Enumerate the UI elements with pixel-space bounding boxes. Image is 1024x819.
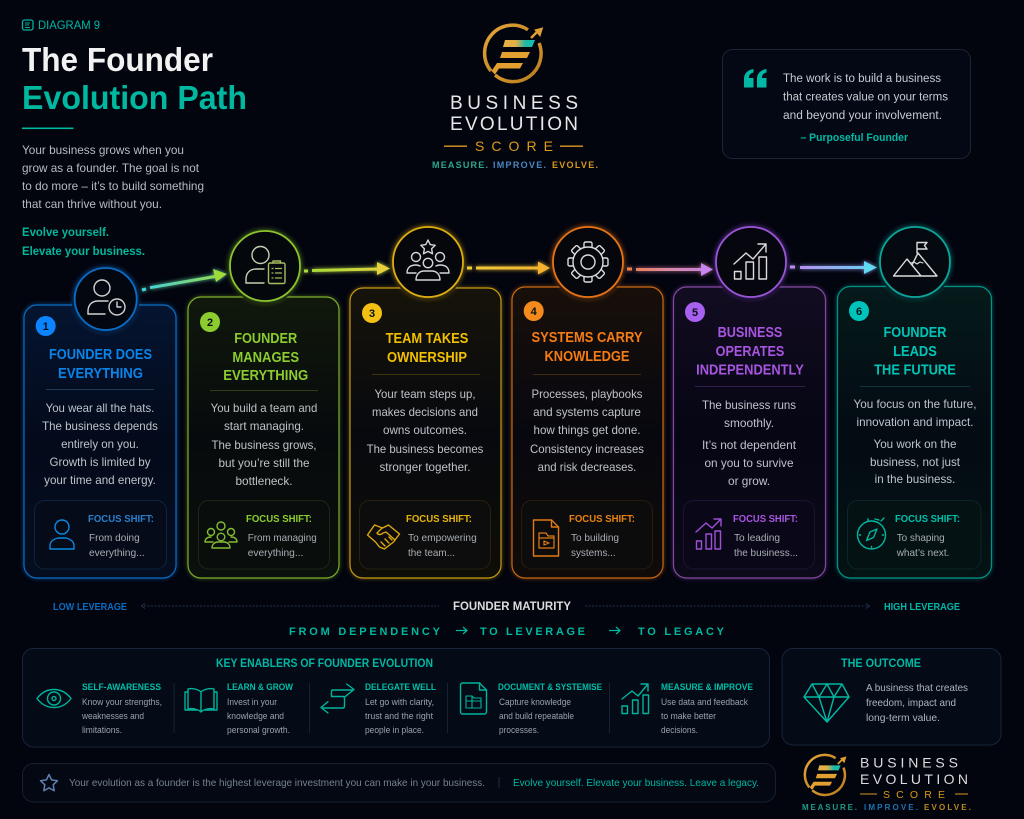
heading: FOUNDER bbox=[234, 331, 298, 347]
item: delegate well: Let go with clarity, bbox=[365, 697, 434, 708]
panel: bottom message: Your evolution as a founder is the highest leverage investment you can make in your business. bbox=[69, 777, 485, 789]
panel: stage 4 bbox=[512, 224, 663, 578]
panel: stage 5 bbox=[674, 224, 826, 578]
heading: THE OUTCOME bbox=[841, 658, 921, 670]
icon: team bbox=[205, 522, 237, 548]
arrow: stage 1 to 2 bbox=[142, 269, 227, 290]
description: Growth is limited by bbox=[50, 455, 150, 469]
icon: eye bbox=[37, 690, 71, 708]
icon: growth chart bbox=[696, 519, 721, 549]
panel: stage 3 bbox=[350, 224, 501, 578]
intro text: Your business grows when you bbox=[22, 143, 184, 157]
logo: Business Evolution Score: MEASURE. bbox=[432, 160, 488, 170]
item: learn and grow: Invest in your bbox=[227, 697, 277, 708]
badge: 6: 6 bbox=[856, 306, 862, 318]
icon: quote mark bbox=[744, 69, 766, 88]
description bbox=[854, 397, 976, 486]
label: low leverage: LOW LEVERAGE bbox=[53, 601, 127, 613]
description: Consistency increases bbox=[530, 442, 644, 456]
panel: bottom message bbox=[22, 764, 776, 802]
title: Evolution Path bbox=[22, 79, 247, 116]
logo: footer: EVOLVE. bbox=[924, 803, 971, 812]
logo: footer: EVOLUTION bbox=[860, 771, 968, 787]
arrow: stage 2 to 3 bbox=[304, 262, 390, 275]
heading: EVERYTHING bbox=[58, 366, 143, 382]
description: freedom, impact and bbox=[866, 697, 956, 709]
description: and risk decreases. bbox=[538, 460, 636, 474]
focus shift bbox=[34, 500, 166, 569]
icon: document bbox=[460, 683, 486, 714]
icon: logo mark bbox=[805, 755, 846, 795]
icon: founder with clock bbox=[72, 265, 140, 333]
focus shift: To leading bbox=[734, 532, 780, 544]
icon: manager with checklist bbox=[227, 228, 303, 304]
focus shift: To building bbox=[571, 532, 619, 544]
focus shift: FOCUS SHIFT: bbox=[406, 513, 472, 525]
quote box bbox=[722, 50, 970, 158]
focus shift: what’s next. bbox=[896, 547, 949, 559]
heading: FOUNDER DOES bbox=[49, 347, 152, 363]
item: self-awareness bbox=[37, 682, 162, 736]
item: document and systemise: DOCUMENT & SYSTEMISE bbox=[498, 682, 602, 693]
heading: THE FUTURE bbox=[874, 362, 956, 378]
focus shift: To empowering bbox=[408, 532, 477, 544]
item: delegate well: DELEGATE WELL bbox=[365, 682, 436, 693]
tagline: from dependency to legacy: FROM DEPENDENCY bbox=[289, 626, 441, 638]
description: entirely on you. bbox=[61, 437, 139, 451]
description: business, not just bbox=[870, 455, 961, 469]
heading bbox=[696, 325, 804, 378]
description: your time and energy. bbox=[44, 473, 156, 487]
description: on you to survive bbox=[704, 456, 794, 470]
heading: MANAGES bbox=[232, 350, 299, 366]
badge: 3 bbox=[362, 303, 382, 323]
icon: compass bbox=[858, 518, 886, 549]
item: delegate well: people in place. bbox=[365, 725, 424, 736]
focus shift: FOCUS SHIFT: bbox=[895, 513, 960, 525]
description bbox=[42, 401, 158, 487]
heading: EVERYTHING bbox=[223, 368, 308, 384]
description: innovation and impact. bbox=[856, 415, 974, 429]
badge: 5: 5 bbox=[692, 307, 698, 319]
item: self-awareness: SELF-AWARENESS bbox=[82, 682, 161, 693]
focus shift bbox=[848, 500, 981, 569]
badge: 4 bbox=[524, 301, 544, 321]
item: document and systemise: processes. bbox=[499, 725, 539, 736]
heading: OPERATES bbox=[716, 344, 785, 360]
focus shift bbox=[360, 500, 490, 569]
tagline: from dependency to legacy bbox=[289, 626, 725, 638]
icon: person bbox=[50, 520, 74, 549]
badge: 1: 1 bbox=[43, 321, 49, 333]
item: measure and improve: Use data and feedback bbox=[661, 697, 748, 708]
description bbox=[702, 398, 797, 488]
description: Your team steps up, bbox=[374, 387, 476, 401]
heading: OWNERSHIP bbox=[387, 350, 467, 366]
focus shift: the team... bbox=[408, 547, 455, 559]
description: or grow. bbox=[728, 474, 770, 488]
description: You work on the bbox=[874, 437, 957, 451]
icon: exchange arrows bbox=[321, 684, 354, 713]
heading bbox=[223, 331, 308, 384]
intro text bbox=[22, 143, 204, 211]
icon: gear bbox=[550, 224, 626, 300]
heading bbox=[49, 347, 152, 382]
arrow: stage 5 to 6 bbox=[790, 261, 877, 274]
icon: handshake bbox=[368, 525, 400, 549]
item: learn and grow bbox=[185, 682, 293, 736]
item: document and systemise: and build repeatable bbox=[499, 711, 574, 722]
description: You build a team and bbox=[211, 401, 317, 415]
axis arrow: left bbox=[142, 604, 439, 608]
description: The business depends bbox=[42, 419, 158, 433]
icon: mountain with flag bbox=[877, 224, 953, 300]
description: how things get done. bbox=[534, 423, 640, 437]
logo: Business Evolution Score: SCORE bbox=[475, 138, 553, 154]
focus shift bbox=[522, 500, 652, 569]
badge: 5 bbox=[685, 302, 705, 322]
focus shift: FOCUS SHIFT: bbox=[569, 513, 635, 525]
item: measure and improve: decisions. bbox=[661, 725, 698, 736]
slogan bbox=[22, 225, 145, 258]
heading bbox=[874, 325, 956, 378]
item: learn and grow: LEARN & GROW bbox=[227, 682, 293, 693]
description: The business becomes bbox=[367, 442, 483, 456]
description bbox=[211, 401, 317, 488]
label: diagram number: DIAGRAM 9 bbox=[38, 20, 100, 32]
icon: diamond bbox=[804, 684, 849, 722]
icon: bar chart bbox=[622, 684, 648, 714]
logo: footer: SCORE bbox=[883, 789, 945, 801]
title: The Founder bbox=[22, 41, 213, 78]
heading: FOUNDER bbox=[884, 325, 947, 341]
description: Processes, playbooks bbox=[532, 387, 642, 401]
label: high leverage: HIGH LEVERAGE bbox=[884, 601, 960, 613]
description: The business runs bbox=[702, 398, 796, 412]
focus shift: everything... bbox=[248, 547, 303, 559]
description: The business grows, bbox=[212, 438, 316, 452]
panel: bottom message: Evolve yourself. Elevate your business. Leave a legacy. bbox=[513, 777, 759, 789]
description: makes decisions and bbox=[372, 405, 478, 419]
logo: Business Evolution Score bbox=[432, 25, 598, 170]
description: in the business. bbox=[875, 472, 955, 486]
item: measure and improve bbox=[622, 682, 753, 736]
panel: stage 1 bbox=[24, 265, 176, 578]
focus shift: FOCUS SHIFT: bbox=[733, 513, 798, 525]
quote box: that creates value on your terms bbox=[783, 92, 948, 104]
intro text: that can thrive without you. bbox=[22, 197, 162, 211]
heading: SYSTEMS CARRY bbox=[532, 330, 643, 346]
description: A business that creates bbox=[866, 682, 968, 694]
description: stronger together. bbox=[380, 460, 470, 474]
arrow: stage 4 to 5 bbox=[627, 263, 713, 276]
description bbox=[367, 387, 483, 474]
badge: 4: 4 bbox=[531, 306, 538, 318]
logo: footer: IMPROVE. bbox=[864, 803, 918, 812]
heading: KEY ENABLERS OF FOUNDER EVOLUTION bbox=[216, 658, 433, 670]
tagline: from dependency to legacy: TO LEVERAGE bbox=[480, 626, 585, 638]
panel: the outcome bbox=[782, 648, 1001, 745]
icon: growth chart bbox=[713, 224, 789, 300]
panel: key enablers bbox=[22, 648, 770, 747]
title bbox=[22, 41, 247, 116]
logo: footer: BUSINESS bbox=[860, 754, 958, 770]
description: owns outcomes. bbox=[383, 423, 467, 437]
focus shift: From managing bbox=[248, 532, 317, 544]
icon: document bbox=[534, 520, 558, 556]
item: document and systemise: Capture knowledge bbox=[499, 697, 571, 708]
quote box: and beyond your involvement. bbox=[783, 110, 942, 122]
panel: stage 6 bbox=[838, 224, 992, 578]
item: document and systemise bbox=[460, 682, 602, 736]
description: bottleneck. bbox=[236, 474, 292, 488]
focus shift: From doing bbox=[89, 532, 140, 544]
intro text: grow as a founder. The goal is not bbox=[22, 161, 200, 175]
badge: 6 bbox=[849, 301, 869, 321]
badge: 2: 2 bbox=[207, 317, 213, 329]
description: It’s not dependent bbox=[702, 438, 797, 452]
description: and systems capture bbox=[533, 405, 641, 419]
badge: 1 bbox=[36, 316, 56, 336]
item: delegate well: trust and the right bbox=[365, 711, 433, 722]
heading: TEAM TAKES bbox=[386, 331, 469, 347]
focus shift bbox=[684, 500, 814, 569]
axis arrow: right bbox=[585, 604, 870, 608]
description: long-term value. bbox=[866, 712, 940, 724]
logo: footer bbox=[802, 754, 971, 812]
slogan: Evolve yourself. bbox=[22, 225, 109, 239]
logo: Business Evolution Score: EVOLVE. bbox=[552, 160, 598, 170]
heading bbox=[386, 331, 469, 366]
focus shift bbox=[198, 500, 330, 569]
description: You focus on the future, bbox=[854, 397, 976, 411]
heading: INDEPENDENTLY bbox=[696, 362, 804, 378]
label: founder maturity: FOUNDER MATURITY bbox=[453, 601, 571, 613]
item: self-awareness: Know your strengths, bbox=[82, 697, 162, 708]
logo: Business Evolution Score: EVOLUTION bbox=[450, 114, 578, 135]
description: smoothly. bbox=[724, 416, 774, 430]
heading: LEADS bbox=[893, 344, 937, 360]
logo: Business Evolution Score: BUSINESS bbox=[450, 93, 578, 114]
focus shift: FOCUS SHIFT: bbox=[88, 513, 154, 525]
logo: footer: MEASURE. bbox=[802, 803, 857, 812]
intro text: to do more – it’s to build something bbox=[22, 179, 204, 193]
quote box: – Purposeful Founder bbox=[800, 132, 909, 144]
item: measure and improve: MEASURE & IMPROVE bbox=[661, 682, 753, 693]
icon: open book bbox=[185, 689, 217, 712]
icon: logo mark bbox=[485, 25, 542, 82]
item: learn and grow: personal growth. bbox=[227, 725, 290, 736]
description: but you’re still the bbox=[218, 456, 310, 470]
tagline: from dependency to legacy: TO LEGACY bbox=[638, 626, 725, 638]
item: measure and improve: to make better bbox=[661, 711, 716, 722]
focus shift: To shaping bbox=[897, 532, 945, 544]
heading: BUSINESS bbox=[718, 325, 783, 341]
item: learn and grow: knowledge and bbox=[227, 711, 284, 722]
description: start managing. bbox=[224, 419, 304, 433]
slogan: Elevate your business. bbox=[22, 244, 145, 258]
description bbox=[530, 387, 644, 474]
logo: Business Evolution Score: IMPROVE. bbox=[493, 160, 546, 170]
focus shift: the business... bbox=[734, 547, 798, 559]
item: delegate well bbox=[321, 682, 436, 736]
badge: 3: 3 bbox=[369, 308, 375, 320]
icon: team with star bbox=[390, 224, 466, 300]
item: self-awareness: limitations. bbox=[82, 725, 122, 736]
quote box: The work is to build a business bbox=[783, 73, 941, 85]
focus shift: everything... bbox=[89, 547, 145, 559]
panel: stage 2 bbox=[188, 228, 339, 578]
description bbox=[866, 682, 968, 724]
item: self-awareness: weaknesses and bbox=[81, 711, 144, 722]
heading: KNOWLEDGE bbox=[544, 349, 630, 365]
focus shift: systems... bbox=[571, 547, 616, 559]
focus shift: FOCUS SHIFT: bbox=[246, 513, 312, 525]
arrow: stage 3 to 4 bbox=[467, 262, 550, 274]
icon: star bbox=[40, 774, 58, 791]
description: You wear all the hats. bbox=[46, 401, 154, 415]
badge: 2 bbox=[200, 312, 220, 332]
heading bbox=[532, 330, 643, 365]
